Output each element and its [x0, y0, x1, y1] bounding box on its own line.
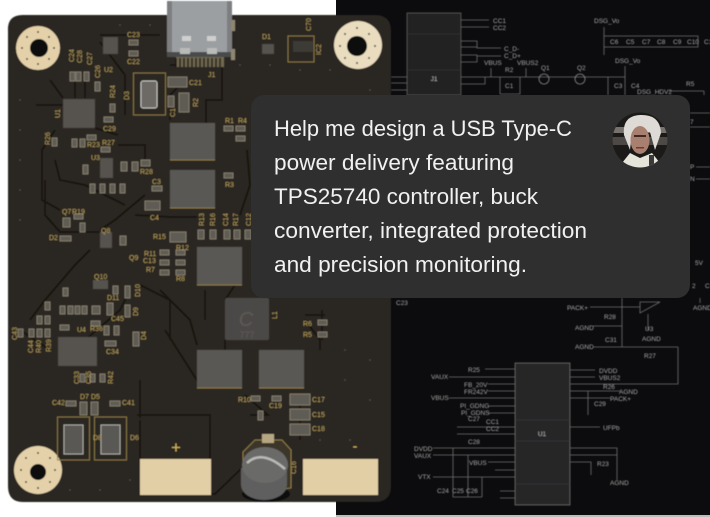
- right edge labels: P: [690, 164, 694, 171]
- silkscreen reference labels: R3: [225, 182, 234, 189]
- U1 controller block: CC2: [486, 426, 499, 433]
- silkscreen reference labels: R8: [176, 276, 185, 283]
- inductor L1: 777: [239, 330, 255, 340]
- J1 connector block: CC1: [493, 18, 506, 25]
- panel: PCB board: [8, 1, 391, 502]
- solder pad plus: [140, 438, 211, 495]
- silkscreen reference labels: U2: [104, 67, 113, 74]
- silkscreen reference labels: R10: [238, 397, 251, 404]
- U3 amplifier area: R27: [644, 353, 656, 360]
- prompt text: and precision monitoring.: [274, 252, 527, 277]
- capacitor bank: C9: [673, 39, 682, 46]
- U1 controller block: AGND: [610, 480, 629, 487]
- silkscreen reference labels: D7: [80, 394, 89, 401]
- silkscreen reference labels: R13: [199, 213, 206, 226]
- silkscreen reference labels: U3: [91, 155, 100, 162]
- silkscreen reference labels: R39: [46, 339, 53, 352]
- inductor L1: C: [239, 309, 254, 331]
- silkscreen reference labels: R26: [45, 132, 52, 145]
- U1 controller block: VAUX: [414, 453, 432, 460]
- silkscreen reference labels: R7: [146, 267, 155, 274]
- U1 controller block: PACK+: [610, 396, 631, 403]
- prompt text: Help me design a USB Type-C: [274, 116, 572, 141]
- J1 connector block: CC2: [493, 25, 506, 32]
- silkscreen reference labels: C34: [106, 349, 119, 356]
- mounting hole top right: [334, 21, 382, 69]
- icon: user portrait avatar: [612, 112, 668, 168]
- J1 connector block: J1: [431, 76, 438, 83]
- U1 controller block: VBUS2: [599, 375, 621, 382]
- VBUS power path with Q1 and Q2: R5: [686, 81, 695, 88]
- silkscreen reference labels: R5: [303, 332, 312, 339]
- silkscreen reference labels: Q9: [129, 255, 138, 262]
- silkscreen reference labels: R12: [176, 245, 189, 252]
- U1 controller block: C25: [452, 488, 464, 495]
- U3 amplifier area: AGND: [575, 344, 594, 351]
- right edge labels: C: [705, 283, 710, 290]
- U3 amplifier area: C31: [605, 337, 617, 344]
- U1 controller block: C26: [466, 488, 478, 495]
- U1 controller block: VAUX: [431, 374, 449, 381]
- silkscreen reference labels: D2: [49, 235, 58, 242]
- U3 amplifier area: AGND: [575, 325, 594, 332]
- silkscreen reference labels: C18: [312, 426, 325, 433]
- silkscreen reference labels: C24: [69, 49, 76, 62]
- silkscreen reference labels: C15: [312, 412, 325, 419]
- silkscreen reference labels: C44: [28, 340, 35, 353]
- VBUS power path with Q1 and Q2: DSG_HDV2: [637, 89, 672, 96]
- VBUS power path with Q1 and Q2: R2: [505, 67, 514, 74]
- silkscreen reference labels: C41: [122, 400, 135, 407]
- silkscreen reference labels: U1: [55, 109, 62, 118]
- silkscreen reference labels: C33: [74, 371, 81, 384]
- U1 controller block: U1: [538, 431, 547, 438]
- silkscreen reference labels: C45: [111, 316, 124, 323]
- capacitor bank: C8: [657, 39, 666, 46]
- ICs U1 U4 U2 U3: [58, 36, 314, 366]
- silkscreen reference labels: Q7: [62, 209, 71, 216]
- U1 controller block: [414, 363, 638, 505]
- silkscreen reference labels: D1: [262, 34, 271, 41]
- panel: schematic: [391, 13, 710, 505]
- VBUS power path with Q1 and Q2: C3: [614, 83, 623, 90]
- U3 amplifier area: [396, 260, 710, 384]
- U1 controller block: FR242V: [464, 389, 489, 396]
- J1 connector block: C_D-: [504, 46, 519, 53]
- VBUS power path with Q1 and Q2: C4: [631, 83, 640, 90]
- silkscreen reference labels: R24: [110, 85, 117, 98]
- silkscreen reference labels: R4: [238, 118, 247, 125]
- via dots: [19, 24, 371, 491]
- U1 controller block: CC1: [486, 419, 499, 426]
- capacitor bank: C6: [610, 39, 619, 46]
- silkscreen reference labels: R6: [303, 321, 312, 328]
- U1 controller block: PI_GDNS: [461, 410, 490, 417]
- silkscreen reference labels: C4: [150, 215, 159, 222]
- mounting hole top left: [16, 26, 60, 70]
- VBUS power path with Q1 and Q2: Q1: [541, 65, 550, 72]
- silkscreen reference labels: C26: [95, 65, 102, 78]
- silkscreen reference labels: J1: [208, 72, 216, 79]
- component outlines D3 D8 D6: [58, 73, 166, 460]
- solder pad minus: [303, 438, 378, 495]
- J1 connector block: C_D+: [504, 53, 521, 60]
- U1 controller block: UFPb: [603, 425, 620, 432]
- silkscreen reference labels: R27: [102, 140, 115, 147]
- electrolytic capacitor C16: [241, 434, 291, 502]
- U3 amplifier area: U3: [645, 326, 654, 333]
- U3 amplifier area: AGND: [642, 336, 661, 343]
- VBUS power path with Q1 and Q2: [484, 58, 704, 96]
- capacitor bank: DSG_Vo: [594, 18, 620, 25]
- silkscreen reference labels: D9: [133, 307, 140, 316]
- right edge labels: 7: [690, 119, 694, 126]
- prompt text: power delivery featuring: [274, 150, 514, 175]
- silkscreen reference labels: C13: [143, 258, 156, 265]
- U1 controller block: C27: [468, 416, 480, 423]
- J1 connector block: [391, 13, 521, 95]
- U1 controller block: PI_GDNG: [460, 403, 489, 410]
- right edge labels: N: [690, 176, 695, 183]
- silkscreen reference labels: R11: [144, 251, 156, 258]
- capacitor bank: [594, 18, 710, 55]
- silkscreen reference labels: R36: [90, 326, 103, 333]
- silkscreen reference labels: C12: [246, 213, 253, 226]
- mounting hole bottom left: [14, 446, 62, 494]
- silkscreen reference labels: L1: [272, 311, 279, 319]
- prompt text: TPS25740 controller, buck: [274, 184, 539, 209]
- silkscreen reference labels: C1: [170, 108, 177, 117]
- silkscreen reference labels: D6: [130, 435, 139, 442]
- inductor L1: [225, 298, 269, 340]
- silkscreen reference labels: C29: [103, 126, 116, 133]
- VBUS power path with Q1 and Q2: DSG_Vo: [615, 58, 641, 65]
- U1 controller block: C24: [437, 488, 449, 495]
- U1 controller block: VTX: [418, 474, 431, 481]
- silkscreen reference labels: Q10: [94, 274, 107, 281]
- silkscreen reference labels: C28: [77, 50, 84, 63]
- solder pad minus: -: [352, 438, 358, 455]
- silkscreen reference labels: R40: [36, 340, 43, 353]
- silkscreen reference labels: C17: [312, 397, 325, 404]
- silkscreen reference labels: C70: [306, 18, 313, 31]
- right edge labels: 2: [692, 283, 696, 290]
- small SMD parts: [18, 40, 327, 435]
- U1 controller block: R26: [603, 384, 615, 391]
- prompt text: [274, 116, 587, 277]
- VBUS power path with Q1 and Q2: VBUS: [484, 60, 502, 67]
- silkscreen reference labels: R16: [210, 213, 217, 226]
- U3 amplifier area: R28: [604, 314, 616, 321]
- silkscreen reference labels: R19: [72, 209, 85, 216]
- U1 controller block: VBUS: [431, 395, 449, 402]
- U3 amplifier area: PACK+: [567, 305, 588, 312]
- silkscreen reference labels: C23: [127, 32, 140, 39]
- silkscreen reference labels: R15: [153, 234, 166, 241]
- U1 controller block: DVDD: [414, 446, 433, 453]
- capacitor bank: C7: [642, 39, 651, 46]
- silkscreen reference labels: C19: [269, 403, 282, 410]
- panel: prompt card: [251, 95, 690, 298]
- right edge labels: [690, 113, 710, 290]
- silkscreen reference labels: C14: [223, 213, 230, 226]
- silkscreen reference labels: C35: [86, 371, 93, 384]
- U1 controller block: VBUS: [469, 460, 487, 467]
- VBUS power path with Q1 and Q2: VBUS2: [517, 60, 539, 67]
- U3 amplifier area: 5V: [695, 260, 704, 267]
- USB-C connector: [167, 1, 235, 67]
- U1 controller block: FB_20V: [464, 382, 488, 389]
- silkscreen reference labels: C42: [52, 400, 65, 407]
- silkscreen reference labels: C27: [87, 52, 94, 65]
- silkscreen reference labels: Q8: [101, 228, 110, 235]
- U1 controller block: C29: [594, 401, 606, 408]
- silkscreen reference labels: R17: [233, 213, 240, 226]
- silkscreen reference labels: IC2: [316, 44, 323, 55]
- silkscreen reference labels: D10: [135, 284, 142, 297]
- U1 controller block: DVDD: [599, 368, 618, 375]
- VBUS power path with Q1 and Q2: C1: [505, 83, 514, 90]
- capacitor bank: C10: [687, 39, 699, 46]
- U1 controller block: AGND: [619, 389, 638, 396]
- silkscreen reference labels: [12, 18, 325, 474]
- large MOSFET packages: [170, 123, 304, 388]
- silkscreen reference labels: D5: [91, 394, 100, 401]
- U1 controller block: C28: [468, 439, 480, 446]
- silkscreen reference labels: C16: [291, 461, 298, 474]
- silkscreen reference labels: R28: [140, 169, 153, 176]
- U3 amplifier area: C23: [396, 300, 408, 307]
- U1 controller block: R23: [597, 461, 609, 468]
- traces: [20, 35, 325, 494]
- silkscreen reference labels: D4: [141, 331, 148, 340]
- prompt text: converter, integrated protection: [274, 218, 587, 243]
- silkscreen reference labels: C22: [127, 59, 140, 66]
- silkscreen reference labels: D8: [93, 435, 102, 442]
- VBUS power path with Q1 and Q2: Q2: [577, 65, 586, 72]
- solder pad plus: +: [171, 438, 181, 457]
- silkscreen reference labels: R23: [87, 142, 100, 149]
- silkscreen reference labels: R2: [193, 98, 200, 107]
- silkscreen reference labels: R42: [108, 371, 115, 384]
- silkscreen reference labels: C21: [189, 80, 202, 87]
- silkscreen reference labels: R1: [225, 118, 234, 125]
- silkscreen reference labels: C43: [12, 327, 19, 340]
- silkscreen reference labels: C3: [152, 179, 161, 186]
- silkscreen reference labels: U4: [77, 327, 86, 334]
- capacitor bank: C5: [626, 39, 635, 46]
- U1 controller block: R25: [468, 367, 480, 374]
- silkscreen reference labels: D11: [107, 295, 119, 302]
- silkscreen reference labels: D3: [124, 91, 131, 100]
